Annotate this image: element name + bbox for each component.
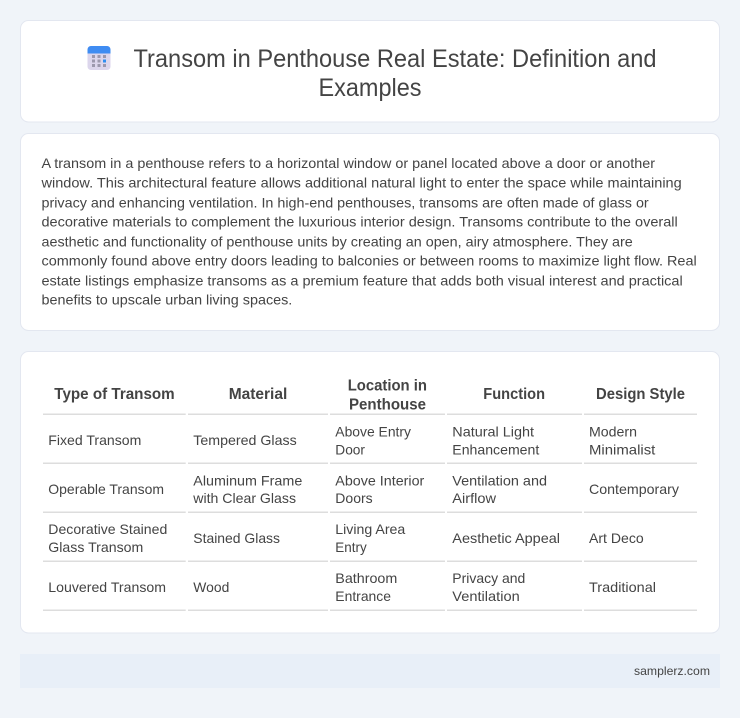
table header row: Design Style xyxy=(596,386,685,403)
table row: louvered transom: Louvered Transom xyxy=(48,579,166,595)
table row: decorative stained glass transom: Art Deco xyxy=(589,530,644,546)
table row: louvered transom: Bathroom xyxy=(335,570,397,586)
table header row: Type of Transom xyxy=(54,386,175,403)
text block: description paragraph: aesthetic and functionality of penthouse units by creating an open, airy atmosphere. They are xyxy=(42,234,633,250)
table row: operable transom: Doors xyxy=(335,490,373,506)
title: Transom in Penthouse Real Estate: Definition and xyxy=(134,45,656,73)
table row: decorative stained glass transom: Stained Glass xyxy=(193,530,280,546)
table row: decorative stained glass transom: Living Area xyxy=(335,521,406,537)
table row: louvered transom: Entrance xyxy=(335,588,391,604)
table row: louvered transom: Traditional xyxy=(589,579,656,595)
table row: operable transom xyxy=(48,472,679,506)
table row: decorative stained glass transom: Glass Transom xyxy=(48,539,143,555)
table row: operable transom: Operable Transom xyxy=(48,481,164,497)
table row: fixed transom: Natural Light xyxy=(452,424,534,440)
panel: transom table xyxy=(20,352,720,633)
table row: fixed transom xyxy=(48,424,655,458)
table header row: Penthouse xyxy=(349,396,426,414)
icon: calendar xyxy=(88,46,110,70)
text block: description paragraph: estate listings emphasize transoms as a premium feature that adds both visual interest and practical xyxy=(42,272,683,288)
table row: operable transom: Aluminum Frame xyxy=(193,472,303,488)
table row: fixed transom: Tempered Glass xyxy=(193,432,297,448)
table row: operable transom: Above Interior xyxy=(335,472,425,488)
table row: louvered transom: Wood xyxy=(193,579,229,595)
footer bar xyxy=(20,654,720,688)
table row: operable transom: Contemporary xyxy=(589,481,679,497)
text block: description paragraph xyxy=(40,155,697,308)
text block: description paragraph: A transom in a penthouse refers to a horizontal window or panel located above a door or another xyxy=(42,155,655,171)
table row: louvered transom: Ventilation xyxy=(452,588,520,604)
table header row: Function xyxy=(483,386,545,403)
text block: description paragraph: commonly found above entry doors leading to balconies or between rooms to maximize light flow. Real xyxy=(42,252,697,268)
panel: description xyxy=(20,134,720,330)
table header row: Material xyxy=(229,386,287,403)
text block: description paragraph: benefits to upscale urban living spaces. xyxy=(42,292,292,308)
panel: title header xyxy=(20,20,720,122)
table row: louvered transom xyxy=(48,570,656,604)
table row: fixed transom: Fixed Transom xyxy=(48,432,141,448)
table header row xyxy=(54,378,685,414)
footer source text: samplerz.com xyxy=(634,664,710,678)
table row: fixed transom: Minimalist xyxy=(589,442,655,458)
table row: decorative stained glass transom xyxy=(48,521,644,555)
table row: operable transom: Airflow xyxy=(452,490,497,506)
table row: decorative stained glass transom: Aesthetic Appeal xyxy=(452,530,560,546)
text block: description paragraph: window. This architectural feature allows additional natural light to enter the space while maintaining xyxy=(40,174,682,190)
text block: description paragraph: decorative materials to complement the luxurious interior design. Transoms contribute to the overall xyxy=(42,214,678,230)
title: Examples xyxy=(318,74,422,102)
text block: description paragraph: privacy and enhancing ventilation. In high-end penthouses, transoms are often made of glass or xyxy=(42,194,649,210)
table row: fixed transom: Above Entry xyxy=(335,424,411,440)
table row: operable transom: Ventilation and xyxy=(452,472,547,488)
table row: operable transom: with Clear Glass xyxy=(192,490,296,506)
title xyxy=(134,45,656,102)
table row: fixed transom: Door xyxy=(335,442,365,458)
table row: fixed transom: Modern xyxy=(589,424,637,440)
table row: decorative stained glass transom: Decorative Stained xyxy=(48,521,167,537)
table row: decorative stained glass transom: Entry xyxy=(335,539,367,555)
table row: louvered transom: Privacy and xyxy=(452,570,525,586)
table header row: Location in xyxy=(348,378,427,394)
table row: fixed transom: Enhancement xyxy=(452,442,539,458)
